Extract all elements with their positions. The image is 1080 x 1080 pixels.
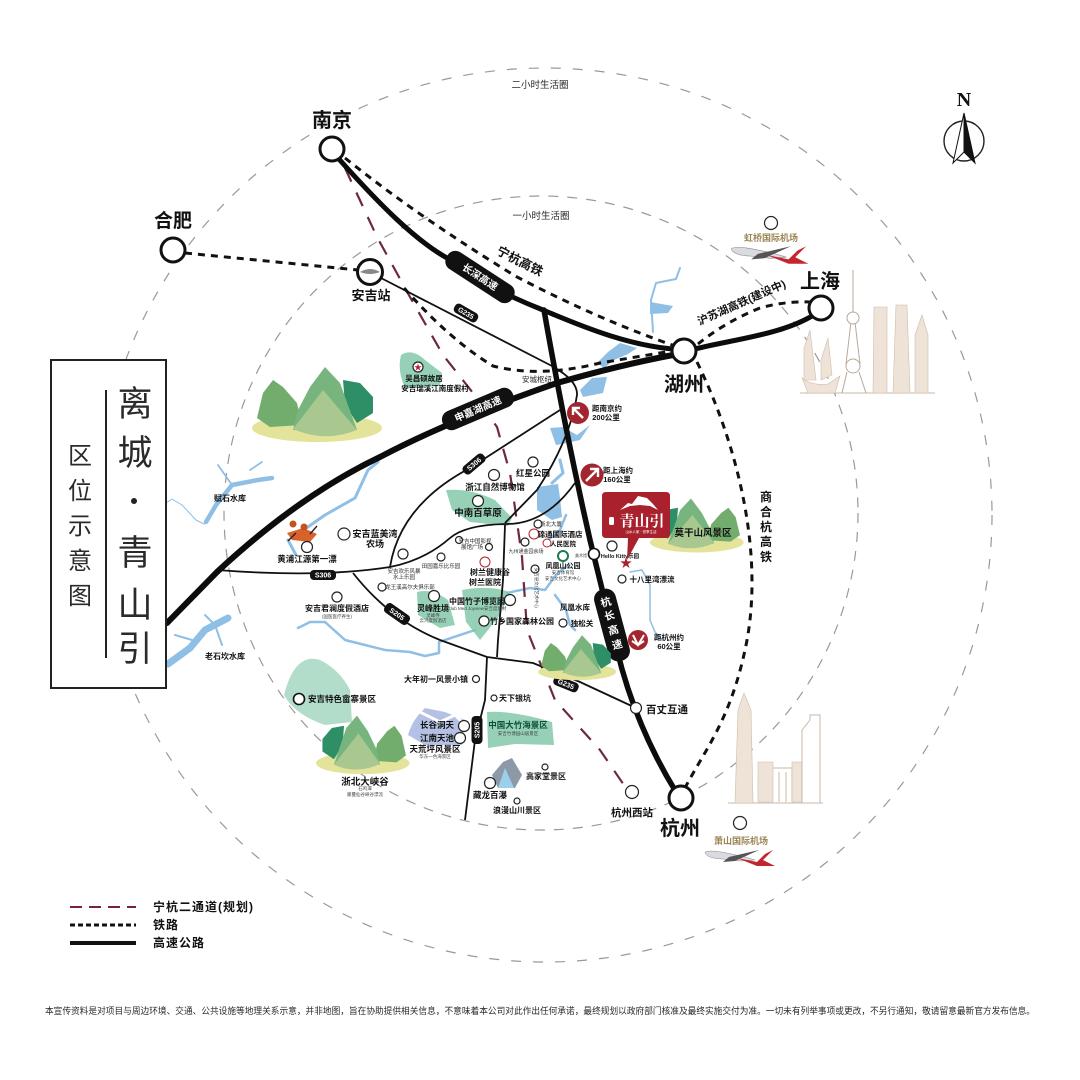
rail labels	[494, 243, 788, 564]
city nodes	[154, 108, 840, 840]
poi: Gaojiatang	[526, 764, 566, 781]
poi: Anji Junlan resort	[305, 592, 369, 620]
Huzhou to Shanghai expressway	[695, 316, 812, 349]
poi: Hongxing park: 红星公园	[516, 468, 550, 478]
compass: N	[957, 89, 972, 111]
badge: S306 horizontal: S306	[315, 572, 331, 580]
poi: Dusong pass	[559, 618, 594, 628]
provincial roads	[217, 278, 636, 820]
poi: Dusong pass: 独松关	[571, 618, 594, 628]
poi: Tianyuan Jiale park: 田园嘉乐比乐园	[422, 562, 461, 570]
poi: Zhejiang natural history museum	[465, 470, 525, 492]
subtitle: 意	[68, 548, 92, 575]
poi: Lingfeng: 灵峰寺	[426, 612, 440, 619]
points of interest	[205, 362, 732, 815]
poi: Zhejiang natural history museum: 浙江自然博物馆	[465, 482, 525, 492]
skyline: Hangzhou	[728, 693, 823, 803]
main title: 离	[117, 385, 153, 424]
main title: 山	[117, 586, 153, 625]
disclaimer: 本宣传资料是对项目与周边环境、交通、公共设施等地理关系示意，并非地图，旨在协助提供相关信息，不意味着本公司对此作出任何承诺，最终规划以政府部门核准及最终实施交付为准。一切未有列举事项或更改，不另行通知，敬请留意最新官方发布信息。	[45, 1005, 1035, 1016]
node: Nanjing	[312, 108, 352, 161]
label: Shanghehang railway: 杭	[760, 519, 772, 534]
Hangchang expressway	[544, 310, 676, 792]
poi: Huangpu river rafting: 黄浦江源第一漂	[277, 554, 337, 564]
poi: Canglong waterfall: 藏龙百瀑	[473, 790, 507, 800]
rivers and reservoirs	[166, 268, 680, 664]
poi: Wu Changshuo residence	[401, 362, 469, 393]
badge: S205 diagonal	[382, 601, 412, 627]
label: Ninghang railway: 宁杭高铁	[494, 243, 546, 279]
legend: expressway: 高速公路	[153, 935, 205, 950]
poi: Shulan hospital: 树兰健康谷	[470, 567, 510, 577]
node: Hangzhou West station	[611, 786, 653, 819]
callout: Qingshanyin project: ★	[620, 556, 632, 570]
label: Husuhu railway: 沪苏湖高铁(建设中)	[695, 276, 788, 328]
badge: Hangchang expressway: 高	[607, 623, 620, 638]
node: Hefei: 合肥	[154, 210, 192, 232]
poi: Huangpu river rafting	[277, 520, 337, 564]
rail and planned lines	[185, 158, 810, 788]
poi: golf club	[378, 583, 435, 591]
poi: Hongxing park	[516, 457, 550, 478]
poi: Zhongnan herb garden: 中南百草原	[454, 507, 502, 519]
node: Hefei	[154, 210, 192, 262]
poi: China Dazhuhai: 安吉竹博园山居景区	[498, 730, 539, 737]
dashed circle: one-hour living zone	[224, 196, 858, 830]
poi: Wu Changshuo residence: ★	[414, 363, 422, 372]
legend	[70, 899, 254, 950]
badge: S205 diagonal: S205	[388, 607, 405, 622]
poi: Hello Kitty park	[601, 541, 640, 560]
poi: China Bamboo Expo park: 中国竹子博览园	[449, 596, 505, 606]
poi: Anji Junlan resort: 安吉君澜度假酒店	[305, 603, 369, 613]
badge: Changshen expressway	[442, 247, 518, 307]
poi: Fushi reservoir: 赋石水库	[214, 493, 246, 503]
mountains: Moganshan	[650, 498, 744, 552]
poi: golf club: 龙王溪高尔夫俱乐部	[385, 583, 435, 591]
poi: China Bamboo Expo park	[447, 594, 516, 612]
poi: Tianhuangping scenic area: 长谷洞天	[420, 720, 454, 730]
title box	[51, 360, 166, 688]
main title: 青	[117, 534, 153, 573]
poi: Wu Changshuo residence: 吴昌硕故居	[405, 373, 443, 383]
poi: Anji Lanmeiwan farm: 农场	[366, 538, 384, 549]
poi: Fenghuangshan park: 安吉体育馆	[552, 569, 575, 576]
poi: water park: 水上乐园	[393, 573, 415, 581]
title vertical rule	[105, 390, 107, 658]
node: Anji station: 安吉站	[351, 288, 391, 303]
airport: Hongqiao	[731, 216, 808, 264]
railway: Husuhu under construction	[698, 302, 810, 344]
legend: railway: 铁路	[153, 917, 179, 932]
poi: Anji plaza: 安吉中国影视	[458, 537, 492, 545]
poi: Canglong waterfall	[473, 758, 522, 800]
poi: Anji plaza: 展馆广场	[461, 543, 483, 551]
poi: Fenghuangshan park: 安吉文化艺术中心	[545, 575, 581, 582]
poi: water park	[387, 549, 421, 581]
poi: Tianxia Yinkeng: 天下银坑	[499, 693, 531, 703]
poi: China Dazhuhai	[488, 720, 548, 737]
badge: Hangchang expressway	[592, 586, 632, 664]
label: one-hour zone: 一小时生活圈	[512, 210, 570, 222]
node: Nanjing: 南京	[312, 108, 352, 132]
dashed circle: two-hour living zone	[98, 68, 992, 962]
subtitle: 示	[68, 513, 92, 540]
poi: vertical label	[531, 565, 540, 609]
railway: Ninghang high-speed	[345, 158, 675, 346]
node: Shanghai	[800, 270, 840, 320]
distance: Shanghai 160 km: 160公里	[603, 475, 631, 484]
distance: Shanghai 160 km: 距上海约	[603, 465, 633, 475]
callout: Qingshanyin project	[602, 492, 670, 570]
poi: Fenghuangshan park	[545, 551, 581, 582]
node: Hangzhou: 杭州	[660, 816, 700, 840]
node: Anji station	[351, 260, 391, 303]
poi: vertical label: 安吉县文化艺术中心	[533, 568, 540, 609]
distance: Shanghai 160 km	[580, 464, 633, 486]
subtitle: 图	[68, 583, 92, 610]
road badges	[310, 247, 632, 744]
label: Shanghehang railway: 合	[760, 504, 772, 519]
badge: G235 upper: G235	[456, 307, 475, 321]
poi: Lingfeng: 灵峰胜境	[417, 603, 449, 613]
main title: 城	[117, 434, 153, 473]
compass	[944, 89, 984, 163]
poi: Jintong hotel: 锦通国际酒店	[538, 529, 583, 539]
distance: Hangzhou 60 km: 60公里	[657, 642, 681, 651]
poi: Ancheng hub: 安城枢纽	[522, 374, 552, 384]
legend: planned corridor: 宁杭二通道(规划)	[153, 899, 254, 914]
subtitle	[68, 443, 92, 610]
badge: S205 vertical	[472, 716, 482, 744]
poi: People's hospital	[543, 539, 576, 548]
badge: S306 diagonal: S306	[466, 457, 483, 473]
label: Shanghehang railway: 商	[760, 489, 772, 504]
node: Baizhang interchange	[630, 702, 688, 716]
poi: Gaojiatang: 高家堂景区	[526, 771, 566, 781]
poi: Tianhuangping scenic area	[408, 708, 470, 760]
poi: water park: 安吉欢乐风暴	[387, 567, 421, 575]
poi: North Zhejiang canyon: 浙北大峡谷	[341, 776, 389, 788]
poi: Zhebei tower	[534, 520, 562, 528]
node: Shanghai: 上海	[800, 270, 840, 293]
node: Baizhang interchange: 百丈互通	[646, 704, 688, 716]
callout: Qingshanyin project: 山水人家 · 悦享生活	[625, 529, 657, 534]
railway: Hefei to Anji	[185, 253, 358, 270]
poi: Anji plaza	[456, 536, 492, 551]
legend: expressway	[70, 935, 205, 950]
green scenic area blobs	[284, 352, 554, 748]
poi: People's hospital: 人民医院	[550, 539, 576, 548]
distance: Nanjing 200 km	[567, 402, 622, 424]
poi: Lingfeng	[417, 590, 449, 624]
poi: Hello Kitty park: Hello Kitty乐园	[601, 552, 640, 560]
airport: Xiaoshan	[705, 816, 775, 866]
poi: Moganshan scenic area: 莫干山风景区	[674, 527, 732, 539]
railway: Shanghehang	[686, 362, 752, 786]
mountains: North Zhejiang canyon	[316, 716, 410, 774]
airport: Hongqiao: 虹桥国际机场	[744, 232, 798, 243]
poi: Fenghuang reservoir: 凤凰水库	[560, 602, 590, 612]
poi: Danian Chuyi town: 大年初一风景小镇	[404, 674, 468, 684]
badge: G235 lower: G235	[556, 678, 575, 691]
node: Hangzhou West station: 杭州西站	[611, 806, 653, 819]
main title: 引	[117, 630, 153, 669]
poi: Zhongnan herb garden	[454, 496, 502, 519]
poi: Lingfeng: 云鸿度假酒店	[420, 617, 447, 624]
poi: Bamboo forest park: 竹乡国家森林公园	[490, 616, 554, 626]
poi: Anji Lanmeiwan farm: 安吉蓝美湾	[352, 528, 398, 539]
subtitle: 位	[68, 478, 92, 505]
label: Shanghehang railway	[760, 489, 772, 564]
label: Shanghehang railway: 铁	[760, 549, 772, 564]
poi: Anji Junlan resort: (国医医疗养生)	[322, 613, 352, 620]
poi: Tianhuangping scenic area: 天荒坪风景区	[409, 744, 461, 754]
badge: G235 upper	[452, 302, 480, 324]
distance: Hangzhou 60 km	[628, 630, 684, 651]
distance: Hangzhou 60 km: 距杭州约	[654, 632, 684, 642]
poi: Shulan hospital: 树兰医院	[469, 577, 501, 587]
poi: Jiuzhou golf	[508, 538, 544, 555]
poi: North Zhejiang canyon: 藤蔓仙谷峡谷漂流	[347, 791, 383, 798]
expressways	[167, 158, 812, 792]
callout: Qingshanyin project: 青山引	[619, 512, 665, 530]
poi: Wu Changshuo residence: 安吉瑞溪江南度假村	[401, 383, 469, 393]
poi: Tianyuan Jiale park	[422, 553, 461, 570]
Shenjiahu expressway	[167, 355, 673, 623]
poi: China Dazhuhai: 中国大竹海景区	[488, 720, 548, 730]
poi: Shibaliwan rafting: 十八里湾漂流	[630, 574, 675, 584]
poi: China Bamboo Expo park: Club Med Joyview安吉度假村	[447, 605, 507, 612]
badge: Shenjiahu expressway: 申嘉湖高速	[452, 393, 504, 425]
subtitle: 区	[68, 443, 92, 470]
poi: art museum: 美术馆	[575, 552, 587, 558]
poi: Jiuzhou golf: 九州通金园余场	[508, 548, 544, 555]
railway: Anji to Huzhou	[404, 288, 672, 371]
main title	[117, 385, 153, 669]
poi: Langman Shanchuan: 浪漫山川景区	[493, 805, 541, 815]
poi: Anji Lanmeiwan farm	[338, 528, 398, 549]
badge: S205 vertical: S205	[474, 722, 482, 738]
airport: Xiaoshan: 萧山国际机场	[714, 835, 768, 846]
mountains: central cluster	[538, 635, 616, 680]
badge: Hangchang expressway: 长	[603, 608, 617, 623]
node: Huzhou	[664, 339, 704, 396]
label: Shanghehang railway: 高	[760, 534, 772, 549]
poi: Anji She village: 安吉特色畲寨景区	[308, 694, 376, 704]
badge: Shenjiahu expressway	[439, 385, 517, 433]
skyline: Shanghai	[800, 270, 935, 393]
badge: Hangchang expressway: 杭	[599, 595, 613, 610]
distance markers	[567, 402, 684, 651]
poi: Tianhuangping scenic area: 华东一色海景区	[419, 753, 451, 760]
poi: North Zhejiang canyon: 石鸣潭	[358, 785, 372, 792]
node: Huzhou: 湖州	[664, 373, 704, 396]
legend: railway	[70, 917, 179, 932]
poi: Fenghuangshan park: 凤凰山公园	[546, 561, 580, 570]
badge: Hangchang expressway: 速	[611, 637, 625, 652]
badge: Changshen expressway: 长深高速	[460, 261, 500, 293]
node: Hangzhou	[660, 786, 700, 840]
distance: Nanjing 200 km: 200公里	[592, 413, 620, 422]
badge: S306 horizontal	[310, 570, 336, 580]
poi: Shulan hospital	[469, 557, 510, 587]
label: two-hour zone: 二小时生活圈	[511, 79, 569, 91]
mountains: west cluster	[252, 367, 382, 442]
legend-linked line: Ninghang second corridor (planned)	[345, 168, 626, 788]
node: junction near Hello Kitty	[588, 548, 600, 560]
poi: Zhebei tower: 浙北大厦	[540, 520, 562, 528]
poi: North Zhejiang canyon	[341, 776, 389, 798]
Changshen expressway	[338, 158, 672, 349]
badge: S306 diagonal	[461, 452, 487, 476]
distance: Nanjing 200 km: 距南京约	[592, 403, 622, 413]
poi: Tianhuangping scenic area: 江南天池	[420, 733, 454, 743]
poi: Laoshikan reservoir: 老石坎水库	[205, 651, 245, 661]
badge: G235 lower	[552, 674, 580, 694]
poi: Langman Shanchuan	[493, 798, 541, 815]
